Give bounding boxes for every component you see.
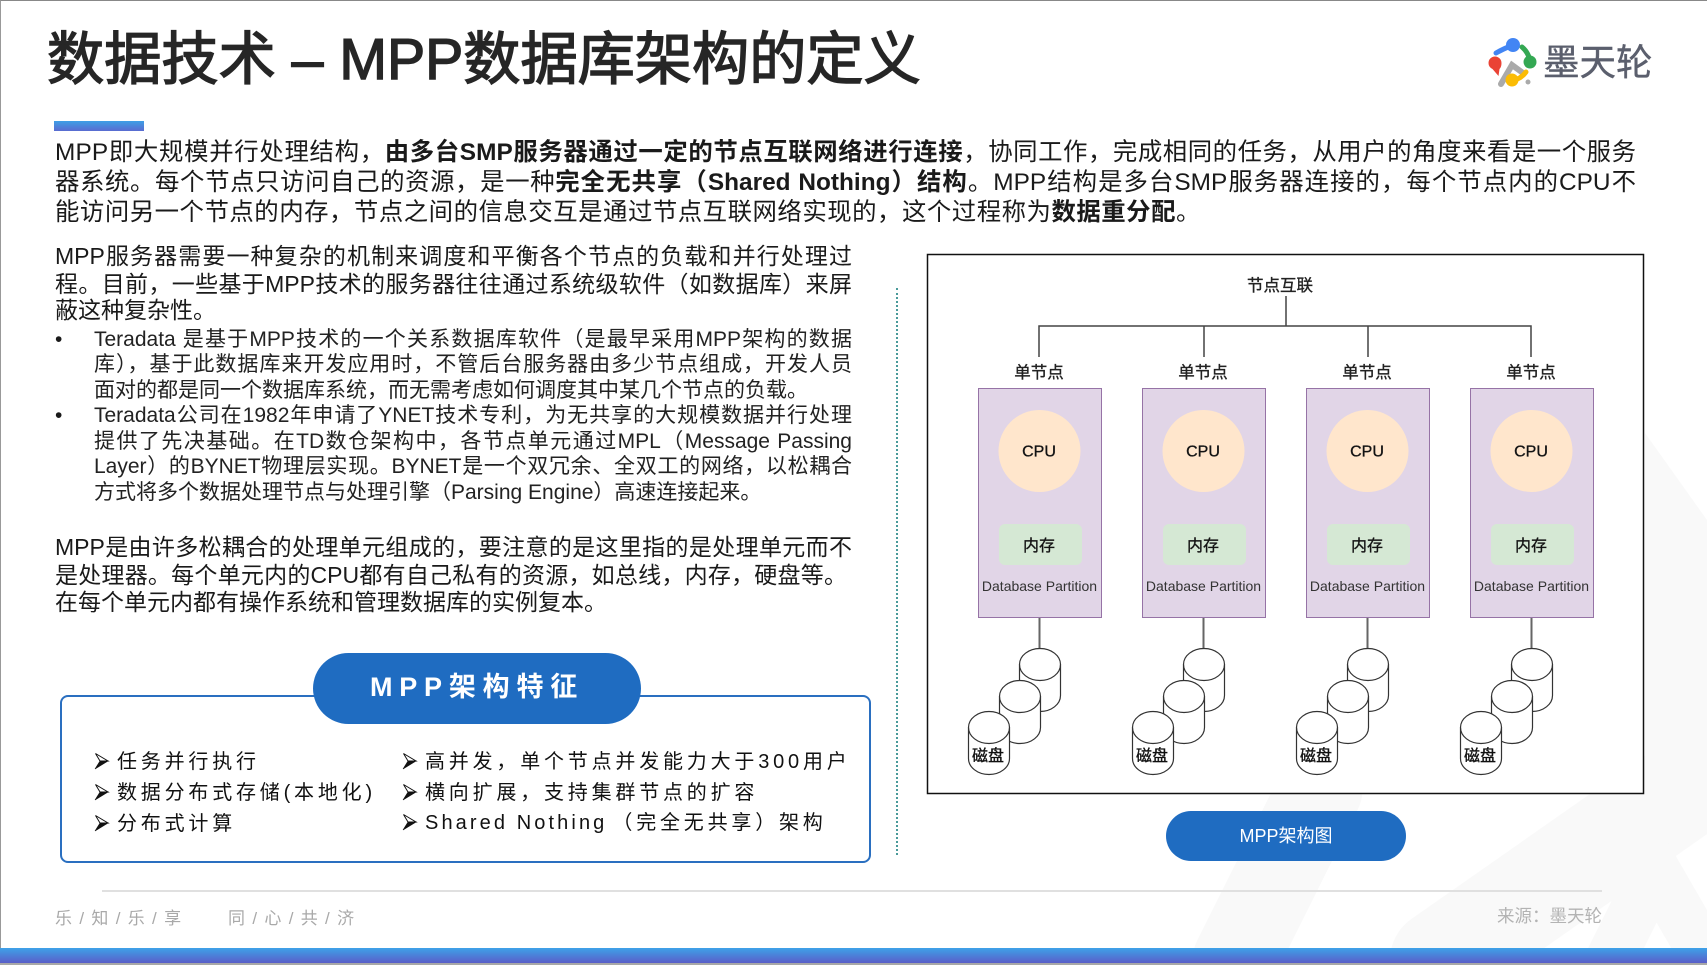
bullet list: Teradata: Layer）的BYNET物理层实现。BYNET是一个双冗余、全双工的网络，以松耦合	[94, 455, 852, 478]
disks 1: 磁盘	[972, 746, 1004, 765]
diagram caption pill: MPP架构图	[1239, 826, 1332, 846]
diagram caption pill	[1166, 811, 1406, 861]
left paragraph: processing units: MPP是由许多松耦合的处理单元组成的，要注意的是这里指的是处理单元而不	[55, 534, 852, 560]
feature list left: 分布式计算	[117, 813, 236, 835]
left paragraph: processing units	[55, 534, 852, 615]
node 1: 单节点	[1014, 363, 1064, 382]
logo	[1488, 38, 1652, 87]
intro paragraph	[55, 138, 1636, 226]
node 4: CPU	[1514, 444, 1548, 460]
feature list right: 高并发，单个节点并发能力大于300用户	[425, 751, 851, 773]
node 3: 单节点	[1342, 363, 1392, 382]
left paragraph: scheduling	[55, 243, 852, 323]
node 4	[1470, 363, 1594, 618]
feature arrows	[94, 753, 418, 832]
node 2: Database Partition	[1146, 578, 1261, 594]
node 3: CPU	[1350, 444, 1384, 460]
node 4: 内存	[1515, 537, 1547, 555]
bullet list: Teradata: 提供了先决基础。在TD数仓架构中，各节点单元通过MPL（Message Passing	[94, 430, 852, 453]
bullet list: Teradata: •	[55, 328, 62, 351]
feature list right: 横向扩展，支持集群节点的扩容	[425, 782, 758, 804]
bullet list: Teradata: 面对的都是同一个数据库系统，而无需考虑如何调度其中某几个节点的负载。	[94, 379, 808, 402]
features heading pill	[313, 653, 641, 724]
node 4: Database Partition	[1474, 578, 1589, 594]
disks 1	[968, 618, 1060, 774]
node 2: 单节点	[1178, 363, 1228, 382]
node 1: Database Partition	[982, 578, 1097, 594]
interconnect label and bus: 节点互联	[1247, 276, 1313, 295]
feature list left	[117, 751, 376, 835]
node 3: Database Partition	[1310, 578, 1425, 594]
disks 3: 磁盘	[1300, 746, 1332, 765]
diagram frame	[928, 254, 1644, 794]
intro paragraph: 能访问另一个节点的内存，节点之间的信息交互是通过节点互联网络实现的，这个过程称为数据重分配。	[55, 199, 1201, 226]
node 3: 内存	[1351, 537, 1383, 555]
footer line	[102, 890, 1602, 892]
node 1	[978, 363, 1102, 618]
node 2: CPU	[1186, 444, 1220, 460]
disks 2	[1132, 618, 1224, 774]
node 2	[1142, 363, 1266, 618]
node 3	[1306, 363, 1430, 618]
footer slogan: 同 / 心 / 共 / 济	[228, 909, 355, 928]
dotted divider	[896, 288, 898, 855]
bullet list: Teradata: Teradata公司在1982年申请了YNET技术专利，为无共享的大规模数据并行处理	[94, 404, 852, 427]
feature list right: Shared Nothing（完全无共享）架构	[425, 812, 827, 834]
footer source: 来源：墨天轮	[1497, 906, 1602, 926]
chart: MPP architecture diagram	[926, 254, 1644, 794]
footer slogan: 乐 / 知 / 乐 / 享	[55, 909, 182, 928]
left paragraph: scheduling: MPP服务器需要一种复杂的机制来调度和平衡各个节点的负载和并行处理过	[55, 243, 852, 269]
features heading pill: MPP架构特征	[370, 672, 584, 702]
accent bar	[54, 121, 144, 131]
bottom edge	[0, 963, 1707, 965]
bottom gradient bar	[0, 948, 1707, 963]
panel: MPP features	[60, 653, 871, 863]
disks 4: 磁盘	[1464, 746, 1496, 765]
bullet list: Teradata: Teradata 是基于MPP技术的一个关系数据库软件（是最早采用MPP架构的数据	[94, 328, 852, 351]
bullet list: Teradata: 库），基于此数据库来开发应用时，不管后台服务器由多少节点组成，开发人员	[94, 353, 852, 376]
node 4: 单节点	[1506, 363, 1556, 382]
disks 4	[1460, 618, 1552, 774]
feature list right	[425, 751, 851, 834]
bullet list: Teradata	[55, 328, 852, 504]
left paragraph: processing units: 是处理器。每个单元内的CPU都有自己私有的资源，如总线，内存，硬盘等。	[55, 562, 847, 588]
left paragraph: scheduling: 程。目前，一些基于MPP技术的服务器往往通过系统级软件（如数据库）来屏	[55, 271, 852, 297]
left paragraph: processing units: 在每个单元内都有操作系统和管理数据库的实例复本。	[55, 589, 607, 615]
bullet list: Teradata: •	[55, 404, 62, 427]
node 1: 内存	[1023, 537, 1055, 555]
feature list left: 数据分布式存储(本地化)	[117, 782, 376, 804]
left paragraph: scheduling: 蔽这种复杂性。	[55, 297, 216, 323]
node 1: CPU	[1022, 444, 1056, 460]
features box outline	[60, 695, 871, 863]
disks 3	[1296, 618, 1388, 774]
feature list left: 任务并行执行	[117, 751, 260, 773]
bullet list: Teradata: 方式将多个数据处理节点与处理引擎（Parsing Engine）高速连接起来。	[94, 481, 761, 504]
interconnect label and bus	[1039, 276, 1531, 357]
disks 2: 磁盘	[1136, 746, 1168, 765]
logo: 墨天轮	[1543, 42, 1652, 83]
intro paragraph: MPP即大规模并行处理结构，由多台SMP服务器通过一定的节点互联网络进行连接，协同工作，完成相同的任务，从用户的角度来看是一个服务	[55, 139, 1636, 166]
intro paragraph: 器系统。每个节点只访问自己的资源，是一种完全无共享（Shared Nothing）结构。MPP结构是多台SMP服务器连接的，每个节点内的CPU不	[55, 169, 1636, 196]
footer slogan	[55, 909, 355, 928]
title: 数据技术 – MPP数据库架构的定义	[47, 28, 921, 92]
node 2: 内存	[1187, 537, 1219, 555]
